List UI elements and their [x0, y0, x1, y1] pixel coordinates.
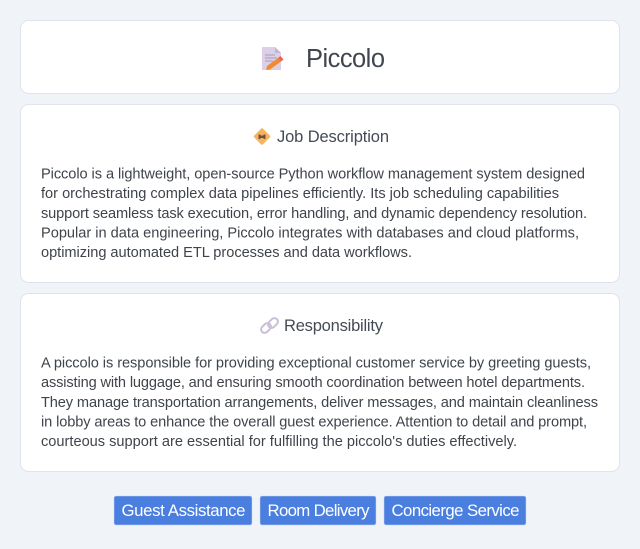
job description text: for orchestrating complex data pipelines efficiently. Its job scheduling capabilities: [41, 186, 559, 202]
job description text: [41, 166, 587, 261]
panel: job description: [20, 104, 620, 282]
responsibility text: They manage transportation arrangements, deliver messages, and maintain cleanliness: [41, 395, 598, 411]
tag: guest assistance: Guest Assistance: [122, 501, 246, 520]
tag: room delivery: [260, 496, 376, 525]
tag: concierge service: Concierge Service: [392, 501, 520, 520]
responsibility text: in lobby areas to enhance the overall guest experience. Attention to detail and prompt,: [41, 414, 587, 430]
responsibility text: A piccolo is responsible for providing exceptional customer service by greeting guests,: [41, 356, 591, 372]
heading: job description: Job Description: [277, 128, 389, 146]
job description text: Piccolo is a lightweight, open-source Python workflow management system designed: [41, 166, 585, 182]
panel: title: [20, 20, 620, 94]
job description text: Popular in data engineering, Piccolo integrates with databases and cloud platforms,: [41, 226, 579, 242]
tag: concierge service: [384, 496, 526, 525]
job description text: optimizing automated ETL processes and data workflows.: [41, 245, 412, 261]
title text: Piccolo: [306, 45, 385, 73]
icon: chain link: [260, 317, 279, 334]
tag: guest assistance: [114, 496, 252, 525]
heading: responsibility: Responsibility: [284, 317, 384, 335]
tag: room delivery: Room Delivery: [268, 501, 370, 520]
icon: diamond sign: [255, 130, 269, 144]
icon: document with pencil: [262, 47, 284, 70]
job description text: support seamless task execution, error handling, and dynamic dependency resolution.: [41, 206, 587, 222]
panel: responsibility: [20, 294, 620, 472]
responsibility text: [41, 356, 598, 450]
responsibility text: assisting with luggage, and ensuring smooth coordination between hotel departments.: [41, 375, 585, 391]
responsibility text: courteous support are essential for fulfilling the piccolo's duties effectively.: [41, 434, 517, 450]
